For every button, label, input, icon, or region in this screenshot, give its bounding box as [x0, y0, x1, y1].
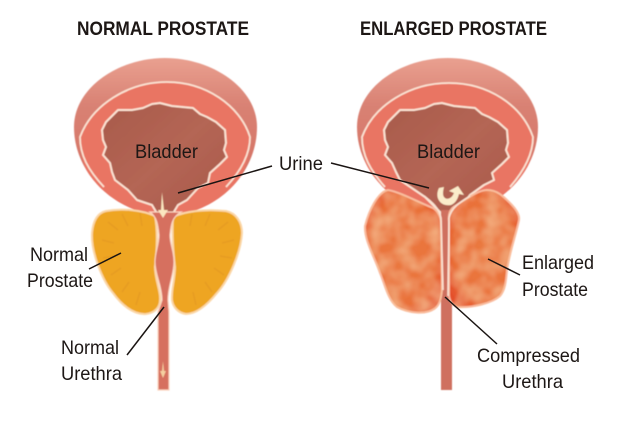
label: enlarged prostate: Enlarged [522, 252, 594, 274]
prostate: normal right lobe [172, 210, 242, 314]
urine arrow: blocked [437, 186, 464, 205]
title: normal prostate: NORMAL PROSTATE [77, 19, 249, 40]
label: normal prostate: Normal [30, 244, 88, 266]
urine arrow: normal [158, 192, 168, 218]
label: compressed urethra: Compressed [477, 345, 580, 367]
prostate rays: normal [102, 213, 234, 305]
label: bladder enlarged: Bladder [417, 141, 480, 163]
prostate: enlarged left lobe [365, 190, 442, 313]
label: enlarged prostate [522, 252, 594, 301]
urethra walls: compressed [424, 196, 470, 296]
diagram: enlarged prostate [357, 58, 538, 390]
title: enlarged prostate: ENLARGED PROSTATE [360, 19, 547, 40]
label: normal urethra [61, 337, 122, 385]
prostate: enlarged right lobe [449, 190, 519, 307]
label: normal prostate [27, 244, 93, 292]
urine arrow: urethra [160, 361, 166, 378]
urethra: normal [150, 212, 181, 390]
prostate: normal left lobe [92, 210, 160, 314]
label: normal urethra: Normal [61, 337, 119, 359]
label: normal urethra: Urethra [61, 363, 122, 385]
bladder: enlarged [357, 58, 538, 225]
diagram: normal prostate [74, 58, 257, 390]
label: compressed urethra: Urethra [502, 371, 563, 393]
label: urine: Urine [279, 153, 323, 175]
label: bladder normal: Bladder [135, 141, 198, 163]
label: normal prostate: Prostate [27, 270, 93, 292]
label: enlarged prostate: Prostate [522, 279, 588, 301]
bladder: normal [74, 58, 257, 225]
label: compressed urethra [477, 345, 580, 393]
urethra: compressed [441, 210, 452, 390]
leader lines [89, 163, 520, 355]
